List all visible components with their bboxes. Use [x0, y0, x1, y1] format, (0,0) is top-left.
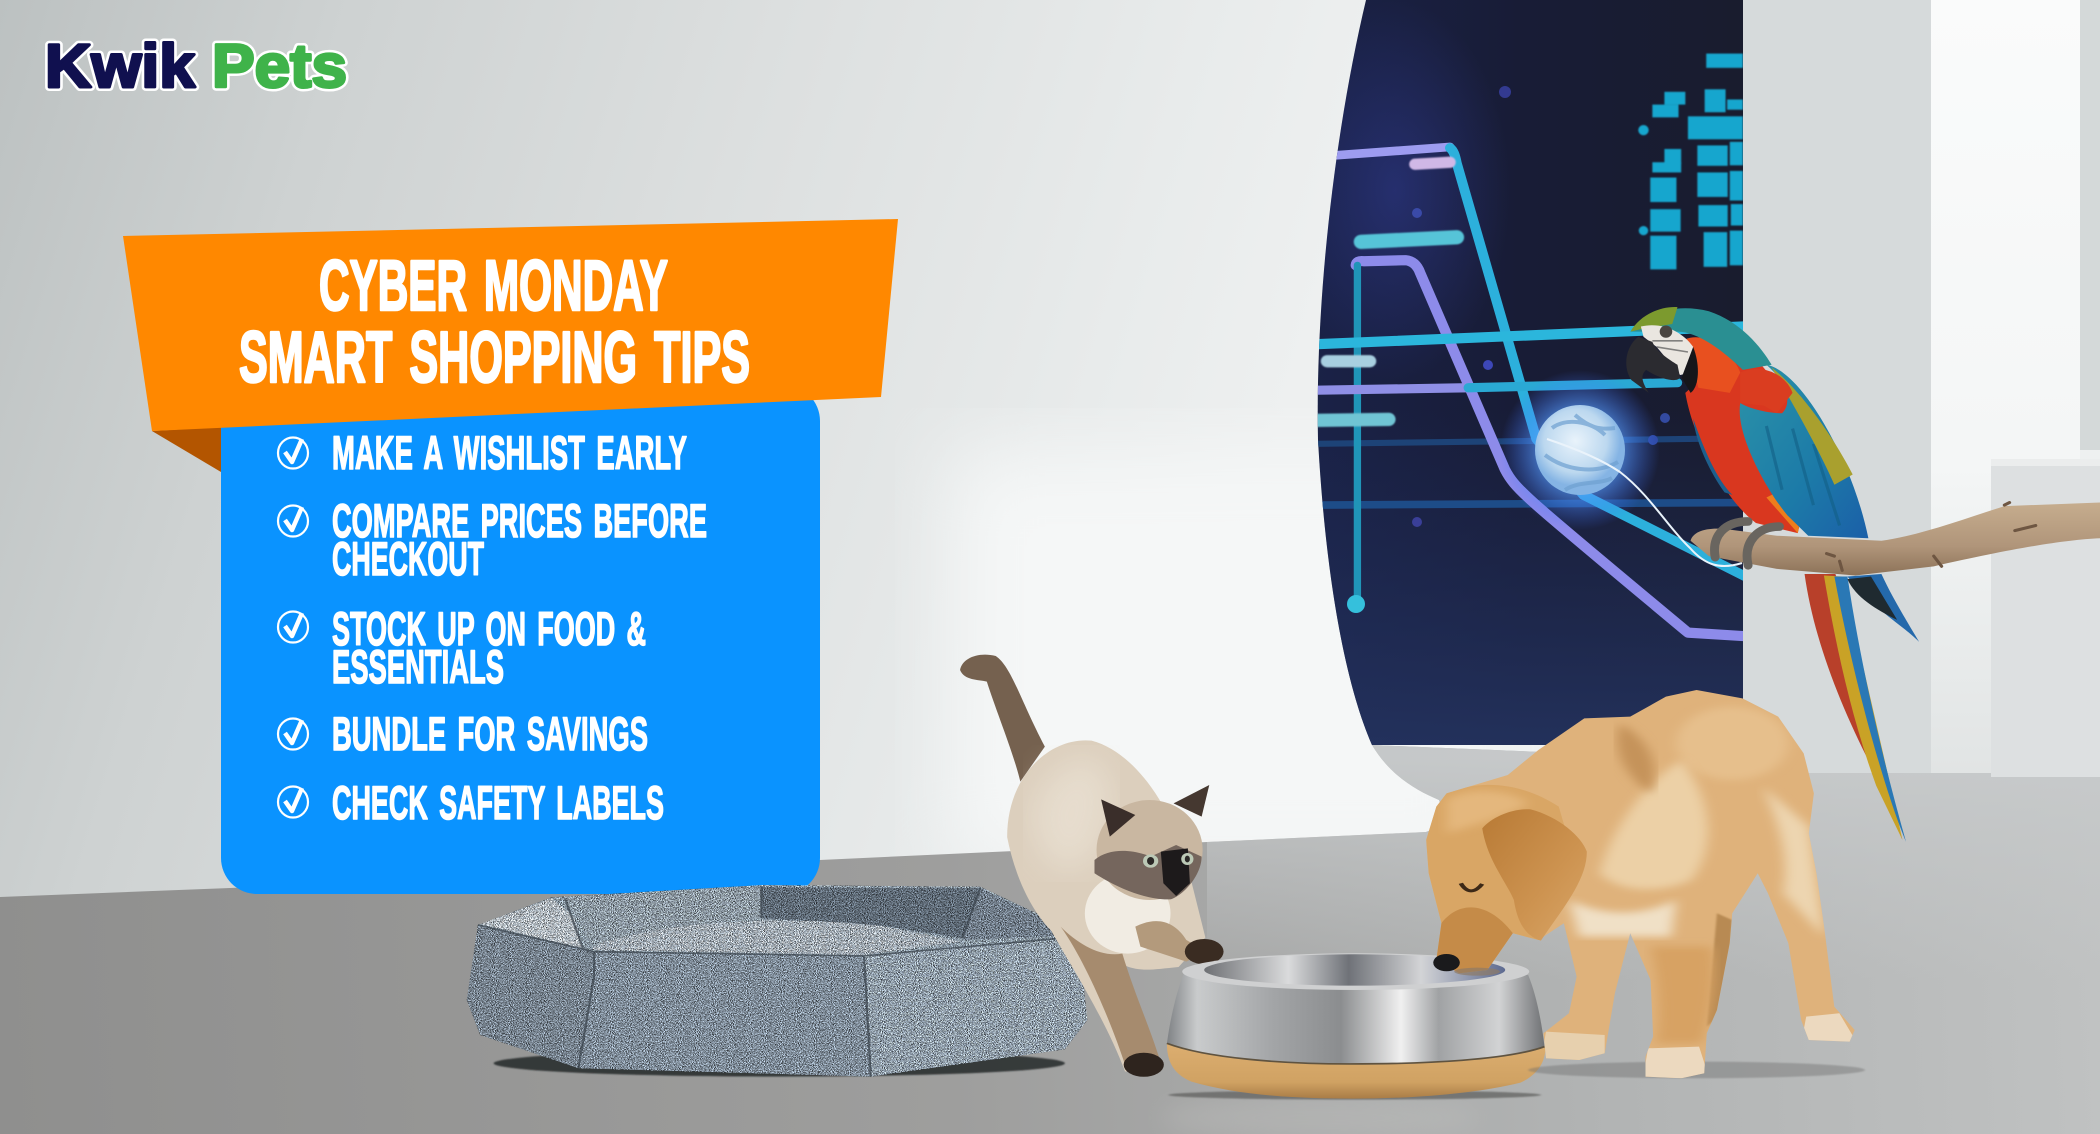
- logo: Kwik Pets: Pets: [212, 32, 347, 100]
- tip 1: MAKE A WISHLIST EARLY: [332, 426, 687, 479]
- title text: [239, 247, 750, 398]
- tip 2: COMPARE PRICES BEFORE: [332, 494, 707, 547]
- wooden perch branch: [1691, 503, 2100, 576]
- stainless steel bowl: [1167, 953, 1546, 1100]
- title banner fold: [152, 427, 221, 472]
- panel: tips list: [221, 385, 820, 894]
- tip 1: [278, 426, 687, 479]
- pet bed: [467, 885, 1087, 1077]
- tip 3: ESSENTIALS: [332, 640, 504, 693]
- tip 5: [278, 776, 664, 829]
- tip 4: BUNDLE FOR SAVINGS: [332, 707, 648, 760]
- title banner: [123, 219, 898, 431]
- cat front paw: [1135, 921, 1224, 964]
- cat head: [1094, 785, 1209, 900]
- dog body: [1421, 687, 1860, 1080]
- logo: Kwik Pets: [45, 32, 347, 100]
- golden retriever puppy: [1421, 687, 1865, 1080]
- digital screen with glowing data lines: [1280, 0, 1745, 745]
- scarlet macaw: [1626, 307, 1868, 565]
- siamese cat: [960, 655, 1224, 1077]
- dog ear: [1482, 809, 1587, 941]
- tip 3: STOCK UP ON FOOD &: [332, 602, 646, 655]
- logo: Kwik Pets: Pets: [212, 32, 347, 100]
- tip 5: CHECK SAFETY LABELS: [332, 776, 664, 829]
- logo: Kwik Pets: Kwik: [45, 32, 195, 100]
- tip 2: [278, 494, 707, 585]
- tip 4: [278, 707, 648, 760]
- dog paws: [1646, 1046, 1705, 1078]
- cat tail: [960, 655, 1045, 782]
- cat body: [1007, 740, 1205, 1077]
- tip 3: [278, 602, 646, 693]
- dog head: [1426, 785, 1564, 970]
- tip 2: CHECKOUT: [332, 532, 484, 585]
- title text: CYBER MONDAY: [319, 247, 668, 326]
- logo: Kwik Pets: Kwik: [45, 32, 195, 100]
- title text: SMART SHOPPING TIPS: [239, 318, 750, 398]
- macaw tail feathers: [1805, 574, 1919, 842]
